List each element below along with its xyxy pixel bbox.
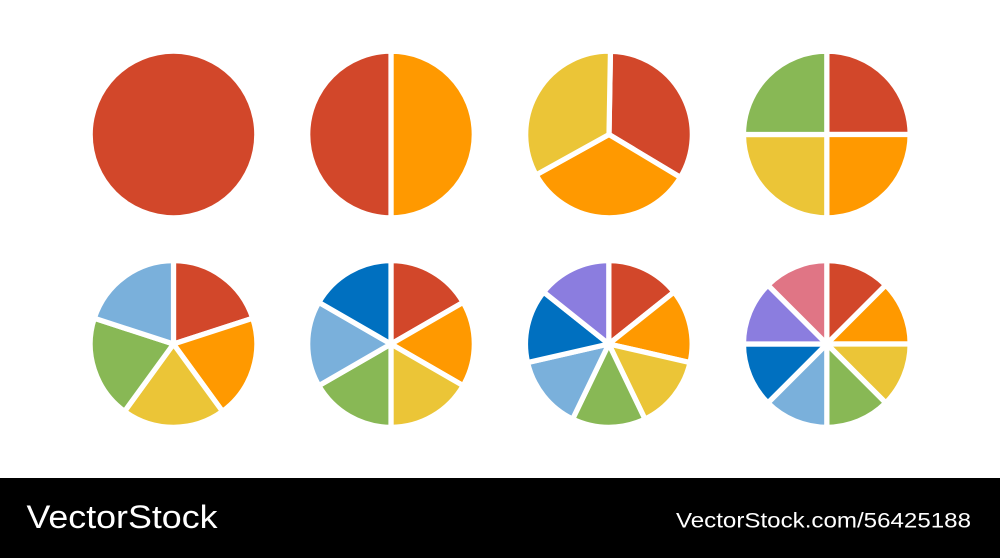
segment: orange — [174, 318, 277, 419]
segment: red — [609, 261, 674, 344]
segment: pink — [768, 243, 868, 344]
segment: red — [827, 261, 886, 344]
segment: green — [319, 344, 391, 427]
segment: purple — [743, 285, 827, 344]
segment: light blue — [768, 344, 827, 427]
segment: orange third — [530, 113, 680, 249]
segment: yellow — [355, 344, 463, 448]
segment: green — [785, 344, 886, 445]
footer bar — [0, 478, 1000, 558]
footer logo text: VectorStock — [26, 499, 219, 535]
pie: 1 segment — [93, 54, 254, 215]
footer image id text: VectorStock.com/56425188 — [676, 510, 971, 532]
pie: 3 segments — [496, 41, 694, 249]
segment: orange quarter — [827, 134, 910, 218]
segment: orange — [827, 285, 927, 386]
segment: purple — [544, 241, 649, 344]
pie: 8 segments — [726, 243, 927, 445]
segment: green — [550, 344, 645, 447]
segment: blue — [726, 302, 827, 403]
segment: red — [391, 261, 463, 344]
pie: 5 segments — [60, 243, 277, 458]
segment: red third — [608, 51, 694, 178]
segment: blue — [319, 240, 427, 344]
segment: yellow — [109, 344, 222, 458]
segment: yellow third — [496, 41, 645, 175]
segment: full red circle — [93, 54, 254, 215]
pie: 7 segments — [513, 241, 715, 447]
segment: light blue — [514, 316, 609, 419]
pie: 4 segments — [743, 51, 910, 218]
pie: 2 segments — [308, 51, 474, 218]
segment: orange — [391, 302, 499, 406]
segment: orange half — [391, 51, 474, 218]
segment: green quarter — [743, 51, 827, 134]
segment: yellow quarter — [743, 134, 827, 218]
segment: yellow — [827, 344, 910, 403]
segment: red — [174, 261, 253, 344]
segment: orange — [609, 292, 715, 395]
segment: light blue — [283, 282, 391, 386]
segment: light blue — [94, 243, 198, 344]
segment: red half — [308, 51, 391, 218]
segment: yellow — [594, 344, 690, 426]
segment: red quarter — [827, 51, 910, 134]
pie: 6 segments — [283, 240, 499, 448]
segment: blue — [513, 281, 609, 363]
segment: green — [60, 297, 174, 411]
